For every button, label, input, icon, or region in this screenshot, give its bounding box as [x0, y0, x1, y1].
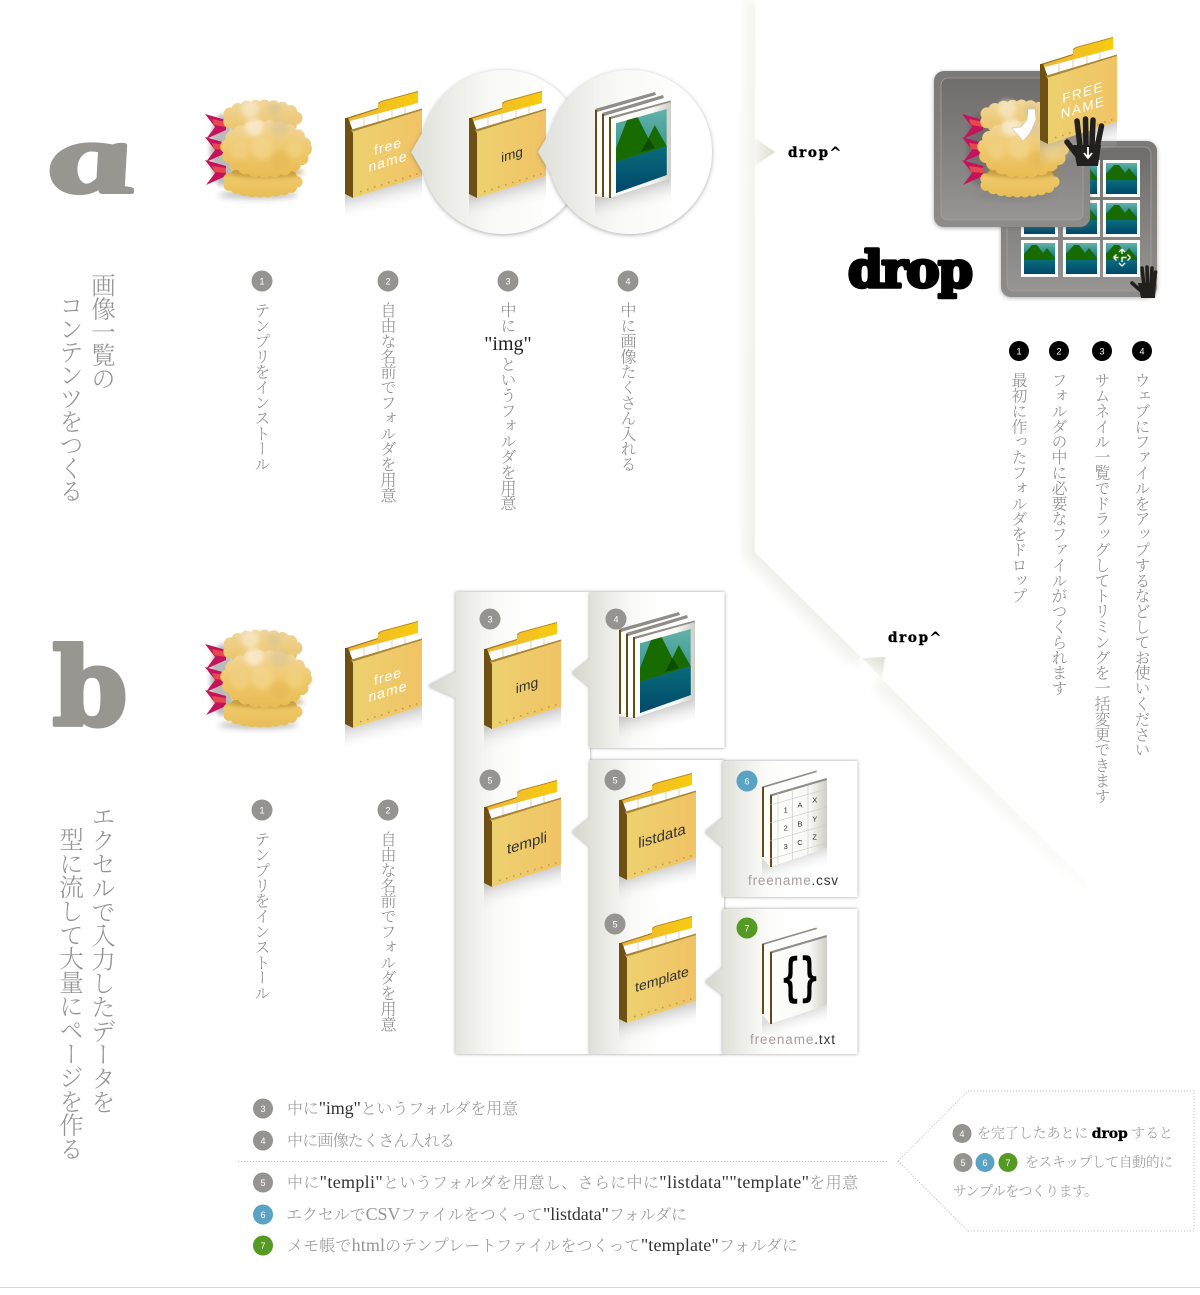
icon: tempura template b [205, 630, 307, 729]
icon: csv sheets [762, 770, 827, 885]
callout: skip note: 5 [960, 1158, 966, 1168]
icon: folder free name b: name [368, 678, 408, 706]
title a line 2: コンテンツをつくる [54, 293, 89, 502]
instruction row 7: メモ帳でhtmlのテンプレートファイルをつくって"template"フォルダに [287, 1235, 798, 1255]
panel: thumbnail list [1001, 141, 1157, 297]
badge 4: 4 [613, 614, 619, 624]
badge 5 listdata: 5 [612, 776, 618, 786]
icon: csv sheets: Z [812, 832, 817, 842]
title b: エクセルで入力したデータを [86, 804, 121, 1113]
icon: csv sheets: C [797, 838, 803, 847]
badge 3 [480, 608, 500, 630]
callout: skip note: をスキップして自動的に [1025, 1155, 1173, 1171]
badge 5 template: 5 [612, 920, 618, 930]
panel: images [572, 592, 724, 748]
heading letter a: a [35, 103, 144, 215]
step badge 3 a [498, 270, 518, 292]
instruction row 6: 6 [260, 1210, 266, 1220]
instruction row 5: 中に"templi"というフォルダを用意し、さらに中に"listdata""template"を用意 [287, 1172, 858, 1192]
label: drop arrow b: drop^ [888, 630, 941, 646]
label: drop arrow a: drop^ [788, 145, 841, 161]
drop step 4 text: ウェブにファイルをアップするなどしてお使いください [1131, 372, 1154, 757]
step badge 4 drop: 4 [1139, 346, 1145, 356]
icon: templi folder [484, 780, 561, 911]
icon: csv sheets: A [797, 800, 803, 810]
icon: folder free name a: free [374, 135, 402, 159]
heading letter b: b [52, 625, 128, 751]
step badge 2 drop [1049, 341, 1069, 361]
callout: skip note: 6 [982, 1158, 988, 1168]
bubble: img folder [411, 70, 585, 234]
icon: template folder [619, 916, 696, 1047]
panel: txt file [705, 909, 858, 1054]
icon: folder free name b: free [374, 665, 402, 689]
badge 5 listdata [604, 770, 626, 790]
step badge 1 b: 1 [259, 806, 265, 816]
badge 7 [736, 918, 758, 938]
icon: folder FREE NAME: FREE [1062, 78, 1104, 106]
instruction row 5: 5 [260, 1178, 266, 1188]
step badge 1 drop [1009, 341, 1029, 361]
badge 4 [606, 608, 626, 630]
badge 7: 7 [744, 924, 750, 934]
icon: folder free name a: name [368, 148, 408, 176]
instruction row 7: 7 [260, 1241, 266, 1251]
step text b2: 自由な名前でフォルダを用意 [377, 831, 400, 1031]
step text b1: テンプリをインストール [251, 831, 274, 1000]
icon: csv sheets: 3 [784, 842, 788, 851]
icon: hand with down arrow [1067, 119, 1102, 166]
instruction row 3: 中に"img"というフォルダを用意 [287, 1098, 518, 1118]
bubble: img folder: img [501, 143, 523, 165]
badge 3: 3 [487, 614, 493, 624]
step badge 4 a [618, 270, 638, 292]
panel: free name contents [428, 592, 590, 1054]
icon: hand [1132, 267, 1156, 298]
icon: tempura template a [205, 100, 307, 199]
badge 5: 5 [487, 776, 493, 786]
step text a2: 自由な名前でフォルダを用意 [377, 302, 400, 502]
icon: csv sheets: B [797, 820, 803, 828]
icon: image files [619, 612, 695, 740]
step badge 1 b [252, 800, 272, 820]
icon: folder FREE NAME: NAME [1061, 92, 1105, 122]
filename txt: freename.txt [750, 1032, 836, 1047]
badge 6: 6 [744, 776, 750, 786]
callout: skip note: を完了したあとに drop すると [977, 1125, 1173, 1142]
step badge 2 b [378, 800, 398, 820]
instruction row 4: 中に画像たくさん入れる [287, 1132, 455, 1150]
step text a3 continued: というフォルダを用意 [497, 356, 520, 510]
filename csv: freename.csv [748, 873, 839, 888]
step badge 3 drop [1092, 341, 1112, 361]
step text a1: テンプリをインストール [251, 302, 274, 471]
step badge 2 b: 2 [385, 806, 391, 816]
icon: img folder [484, 622, 561, 753]
bubble: image files [538, 70, 712, 234]
instruction row 3: 3 [260, 1104, 266, 1114]
step badge 4 drop [1132, 341, 1152, 361]
arrow: fold notch [862, 657, 885, 679]
step text a3: 中に [497, 302, 520, 333]
icon: img folder: img [516, 675, 538, 697]
title b line 2: 型に流して大量にページを作る [54, 827, 89, 1160]
step badge 1 drop: 1 [1016, 346, 1022, 356]
step badge 2 drop: 2 [1056, 346, 1062, 356]
icon: folder free name b [345, 621, 422, 752]
icon: txt pages: {} [781, 947, 819, 1009]
drop step 1 text: 最初に作ったフォルダをドロップ [1008, 372, 1031, 603]
callout: skip note: サンプルをつくります。 [953, 1184, 1098, 1200]
icon: csv sheets: 1 [784, 806, 788, 814]
instruction row 6: エクセルでCSVファイルをつくって"listdata"フォルダに [286, 1204, 687, 1224]
instruction row 4: 4 [260, 1136, 266, 1146]
panel: csv file [705, 761, 858, 897]
step badge 2 a [378, 270, 398, 292]
icon: folder free name a [345, 91, 422, 222]
callout: skip note [898, 1091, 1194, 1231]
step badge 1 a: 1 [259, 276, 265, 286]
folded paper shadow [755, 0, 1200, 905]
icon: listdata folder [619, 773, 696, 904]
title a: 画像一覧の [86, 273, 121, 389]
icon: csv sheets: Y [812, 814, 817, 824]
step badge 4 a: 4 [625, 276, 631, 286]
icon: folder FREE NAME [1040, 37, 1117, 168]
step badge 3 drop: 3 [1099, 346, 1105, 356]
badge 6 [736, 770, 758, 792]
step badge 3 a: 3 [505, 276, 511, 286]
icon: csv sheets: 2 [784, 824, 788, 832]
step badge 2 a: 2 [385, 276, 391, 286]
step text img: "img" [484, 333, 532, 355]
icon: csv sheets: X [812, 796, 817, 804]
icon: listdata folder: listdata [638, 821, 686, 852]
panel: templi contents [572, 760, 724, 1054]
step badge 1 a [252, 270, 272, 292]
icon: template folder: template [635, 964, 689, 996]
panel: tempura drop window [934, 71, 1090, 227]
step text a4: 中に画像たくさん入れる [617, 302, 640, 471]
badge 5 template [604, 914, 626, 934]
heading drop: drop [848, 240, 973, 299]
drop step 2 text: フォルダの中に必要なファイルがつくられます [1048, 372, 1071, 695]
badge 5 [480, 770, 500, 790]
arrow: to drop step [755, 138, 775, 166]
callout: skip note: 7 [1005, 1158, 1011, 1168]
icon: txt pages [762, 928, 827, 1042]
drop step 3 text: サムネイル一覧でドラッグしてトリミングを一括変更できます [1091, 372, 1114, 803]
callout: skip note: 4 [959, 1129, 965, 1139]
icon: templi folder: templi [507, 829, 547, 858]
